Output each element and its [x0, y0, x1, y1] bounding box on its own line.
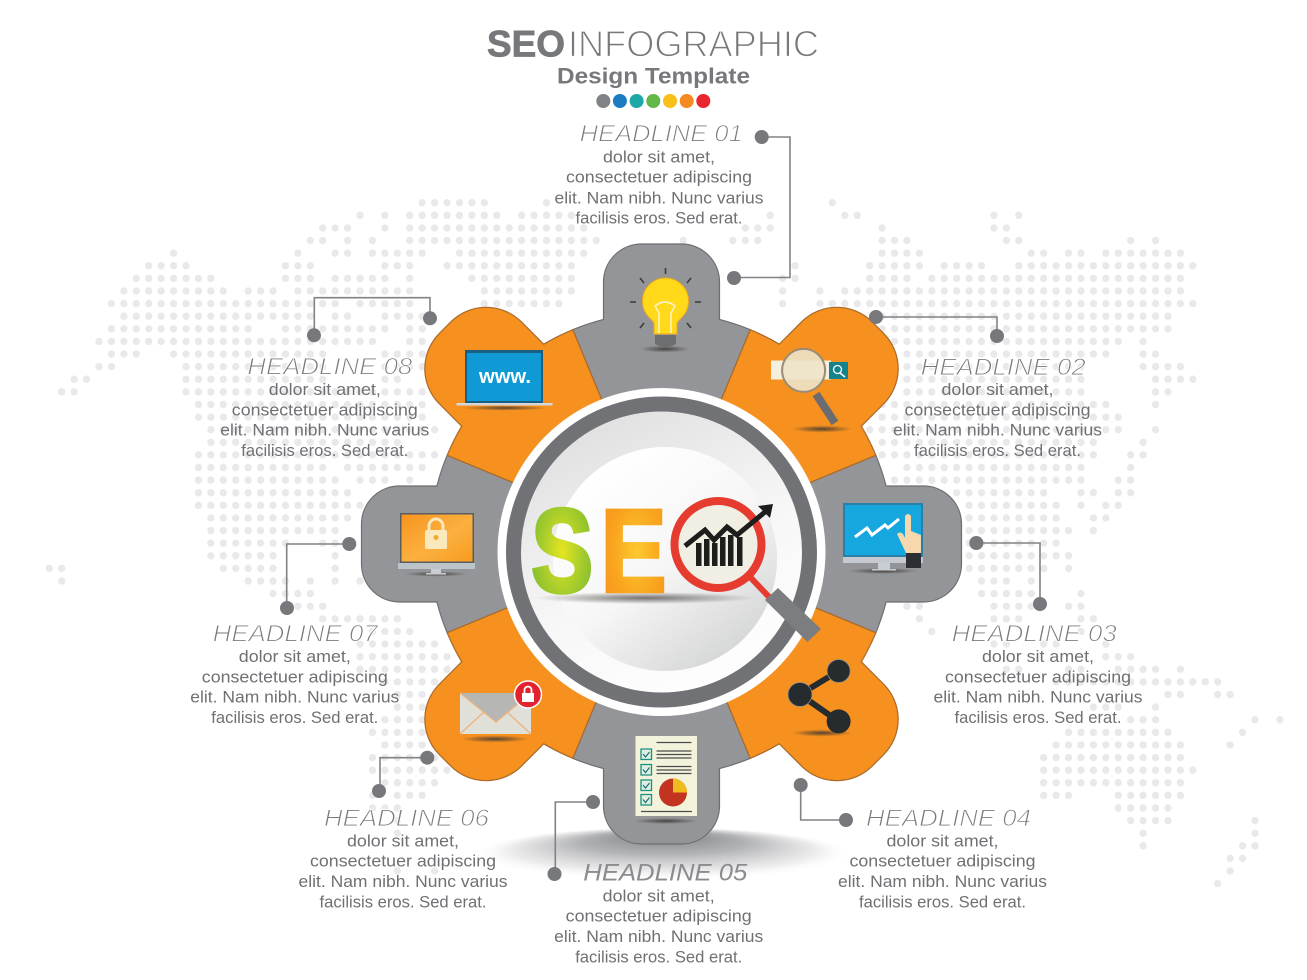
text block: headline 05: HEADLINE 05 [583, 860, 748, 887]
text block: headline 06: dolor sit amet, [347, 831, 459, 850]
text block: headline 08: facilisis eros. Sed erat. [241, 441, 408, 460]
background dotted world map [49, 203, 1280, 884]
text block: headline 07: consectetuer adipiscing [202, 667, 388, 686]
SEO lettering: E [600, 485, 667, 617]
text block: headline 02: HEADLINE 02 [921, 354, 1086, 381]
icon: light bulb [630, 268, 701, 352]
connector 07 [280, 537, 356, 615]
ground shadow [473, 827, 853, 881]
text block: headline 04: consectetuer adipiscing [850, 852, 1036, 871]
text block: headline 03: consectetuer adipiscing [945, 667, 1131, 686]
connector 01 [727, 130, 790, 285]
connector 08 [307, 298, 437, 342]
text block: headline 07: elit. Nam nibh. Nunc varius [190, 688, 399, 707]
text block: headline 05: consectetuer adipiscing [566, 907, 752, 926]
text block: headline 05 [554, 860, 763, 966]
text block: headline 04: facilisis eros. Sed erat. [859, 892, 1026, 911]
connector 05 [548, 795, 600, 881]
icon: search bar and magnifier [771, 349, 852, 432]
icon: share nodes [788, 660, 852, 736]
text block: headline 01: dolor sit amet, [603, 147, 715, 166]
icon: monitor with rising chart and hand [843, 503, 923, 574]
colour dots row [596, 94, 710, 108]
text block: headline 07: dolor sit amet, [239, 647, 351, 666]
connector 03 [969, 536, 1047, 611]
text block: headline 02: consectetuer adipiscing [904, 400, 1090, 419]
icon: monitor with padlock [398, 513, 475, 576]
text block: headline 04: dolor sit amet, [886, 831, 998, 850]
subtitle: Design Template [557, 63, 750, 88]
text block: headline 04: HEADLINE 04 [866, 805, 1031, 832]
text block: headline 01: HEADLINE 01 [580, 121, 743, 148]
text block: headline 02 [893, 354, 1102, 460]
text block: headline 07: facilisis eros. Sed erat. [211, 708, 378, 727]
connector 02 [869, 310, 1004, 343]
text block: headline 08: consectetuer adipiscing [232, 400, 418, 419]
title: INFOGRAPHIC [568, 24, 819, 65]
icon: laptop with www [456, 350, 552, 410]
text block: headline 01 [554, 121, 764, 227]
text block: headline 05: dolor sit amet, [603, 886, 715, 905]
text block: headline 01: consectetuer adipiscing [566, 168, 752, 187]
text block: headline 06: elit. Nam nibh. Nunc varius [298, 872, 508, 891]
text block: headline 02: elit. Nam nibh. Nunc varius [893, 421, 1102, 440]
text block: headline 08 [220, 354, 429, 460]
text block: headline 07 [190, 621, 399, 727]
text block: headline 01: elit. Nam nibh. Nunc varius [554, 188, 764, 207]
central magnifier lens [498, 388, 826, 716]
gear wheel [362, 244, 962, 844]
text block: headline 04: elit. Nam nibh. Nunc varius [838, 872, 1047, 891]
icon: envelope with red lock [460, 681, 542, 742]
text block: headline 02: facilisis eros. Sed erat. [914, 441, 1081, 460]
title: SEO [487, 24, 565, 65]
text block: headline 08: elit. Nam nibh. Nunc varius [220, 421, 429, 440]
magnifier O with growth chart [674, 501, 821, 642]
icon: laptop with www: www. [478, 365, 531, 388]
text block: headline 04 [838, 805, 1047, 911]
SEO lettering: S [532, 486, 593, 617]
text block: headline 06 [298, 805, 508, 911]
text block: headline 03 [934, 620, 1142, 727]
connector 06 [372, 751, 434, 798]
text block: headline 08: dolor sit amet, [269, 380, 381, 399]
text block: headline 05: facilisis eros. Sed erat. [575, 947, 742, 966]
text block: headline 03: elit. Nam nibh. Nunc varius [934, 688, 1142, 707]
text block: headline 03: facilisis eros. Sed erat. [954, 708, 1122, 727]
text block: headline 06: HEADLINE 06 [324, 805, 490, 832]
icon: checklist report document [634, 736, 698, 824]
text block: headline 07: HEADLINE 07 [213, 621, 379, 648]
text block: headline 08: HEADLINE 08 [247, 354, 413, 380]
connector 04 [794, 778, 853, 827]
text block: headline 03: dolor sit amet, [982, 647, 1094, 666]
text block: headline 06: consectetuer adipiscing [310, 852, 496, 871]
text block: headline 01: facilisis eros. Sed erat. [576, 208, 742, 227]
SEO lettering [532, 485, 755, 617]
text block: headline 05: elit. Nam nibh. Nunc varius [554, 927, 763, 946]
text block: headline 03: HEADLINE 03 [952, 620, 1117, 648]
text block: headline 06: facilisis eros. Sed erat. [320, 892, 486, 911]
text block: headline 02: dolor sit amet, [942, 380, 1054, 399]
